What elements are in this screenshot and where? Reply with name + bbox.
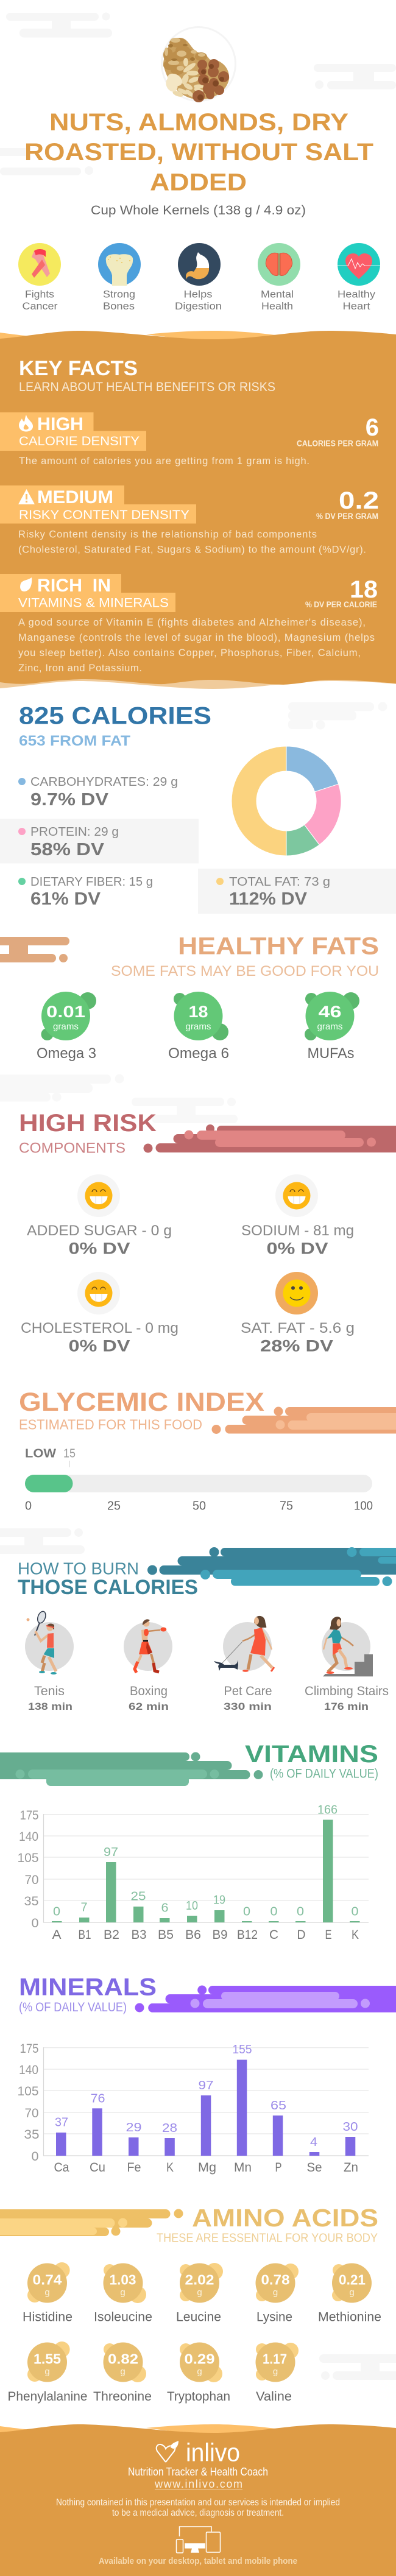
bar chart: minerals: Mg: [198, 2161, 216, 2175]
description: [18, 617, 375, 674]
amino: methionine: Methionine: [318, 2310, 381, 2324]
bar chart: minerals: Ca: [54, 2161, 69, 2175]
heading: HOW TO BURN: [18, 1559, 139, 1578]
text: helps digestion: Helps: [184, 289, 212, 300]
bar chart: vitamins: [17, 1803, 369, 1942]
bar chart: minerals: Mn: [234, 2161, 252, 2175]
title: [24, 109, 373, 196]
text: fights cancer: Cancer: [22, 301, 58, 312]
amino: isoleucine: [94, 2264, 152, 2324]
label: high: HIGH: [37, 414, 83, 434]
fat: mufas: 46: [318, 1003, 341, 1021]
heading: HEALTHY FATS: [178, 933, 379, 960]
legend: total fat: TOTAL FAT: 73 g: [229, 875, 330, 889]
bar chart: minerals: P: [275, 2161, 281, 2175]
item: cholesterol: [21, 1272, 179, 1355]
heading: THOSE CALORIES: [18, 1576, 198, 1599]
heading: HIGH RISK: [19, 1110, 157, 1137]
legend: total fat: [198, 869, 396, 914]
bar chart: minerals: 97: [199, 2079, 213, 2092]
bar chart: vitamins: 166: [317, 1803, 338, 1816]
bar chart: minerals: 70: [24, 2106, 39, 2120]
icon: heart, healthy heart: [338, 243, 380, 286]
legend: carbohydrates: CARBOHYDRATES: 29 g: [30, 775, 178, 789]
bar chart: vitamins: 97: [104, 1846, 118, 1859]
amino: methionine: g: [349, 2287, 355, 2298]
activity labels: 138 min: [28, 1701, 72, 1712]
subheading: (% OF DAILY VALUE): [270, 1766, 378, 1781]
text: mental health: Health: [261, 301, 293, 312]
hero food photo: mixed nuts: [162, 27, 235, 102]
item: added sugar: 0% DV: [68, 1239, 130, 1257]
bar chart: minerals: 29: [126, 2121, 141, 2134]
amino: threonine: g: [120, 2366, 126, 2377]
bar chart: vitamins: B3: [132, 1928, 146, 1942]
unit: CALORIES PER GRAM: [297, 439, 378, 448]
gauge: low 15: 0: [25, 1500, 32, 1513]
gauge: low 15: 15: [63, 1447, 76, 1461]
amino: tryptophan: [167, 2343, 230, 2404]
bar chart: vitamins: 0: [53, 1905, 60, 1919]
item: cholesterol: 0% DV: [68, 1336, 130, 1355]
panel: vitamins: [0, 1741, 378, 1942]
item: sodium: [241, 1174, 354, 1257]
legend: protein: [0, 819, 199, 864]
bar chart: vitamins: B12: [237, 1928, 258, 1942]
bar chart: minerals: 30: [342, 2120, 358, 2134]
bar chart: vitamins: B9: [212, 1928, 228, 1942]
panel: how to burn those calories: [18, 1547, 396, 1712]
item: sodium: 0% DV: [267, 1239, 328, 1257]
text: mental health: [261, 289, 294, 312]
fact: medium risky content density: [0, 485, 379, 556]
logo: inlivo: inlivo: [186, 2438, 240, 2467]
bar chart: minerals: Fe: [127, 2161, 141, 2175]
heading: VITAMINS: [245, 1741, 378, 1768]
text: healthy heart: [338, 289, 376, 312]
amino: leucine: 2.02: [185, 2272, 214, 2288]
icon: stomach, helps digestion: [178, 243, 221, 286]
text: helps digestion: Digestion: [175, 301, 222, 312]
item: added sugar: ADDED SUGAR - 0 g: [27, 1223, 172, 1239]
bar chart: minerals: Cu: [90, 2161, 105, 2175]
text: healthy heart: Healthy: [338, 289, 376, 300]
heading: key facts: KEY FACTS: [19, 357, 138, 380]
amino: phenylalanine: g: [44, 2366, 50, 2377]
amino: histidine: Histidine: [23, 2310, 72, 2324]
fat: mufas: MUFAs: [307, 1045, 355, 1062]
text: fights cancer: [22, 289, 58, 312]
disclaimer: to be a medical advice, diagnosis or treatment.: [112, 2508, 284, 2518]
heading: MINERALS: [19, 1974, 157, 2001]
amino: lysine: g: [273, 2287, 278, 2298]
amino: threonine: 0.82: [108, 2351, 138, 2367]
amino: isoleucine: 1.03: [110, 2272, 136, 2288]
decorative banner: [147, 1547, 396, 1586]
donut chart: [232, 746, 341, 856]
icon: devices: [177, 2527, 221, 2553]
amino: methionine: [318, 2264, 381, 2324]
text: strong bones: Strong: [103, 289, 135, 300]
amino: leucine: g: [197, 2287, 202, 2298]
decorative banner: [144, 1124, 396, 1152]
description: [18, 529, 366, 556]
title: ADDED: [150, 169, 247, 196]
bar chart: minerals: 37: [55, 2116, 68, 2130]
unit: % DV PER GRAM: [316, 512, 378, 521]
decorative banner: [135, 1986, 396, 2013]
item: saturated fat: SAT. FAT - 5.6 g: [241, 1320, 355, 1336]
gauge: low 15: 50: [193, 1500, 206, 1513]
description: Risky Content density is the relationship of bad components: [18, 529, 317, 540]
bar chart: vitamins: 7: [80, 1900, 88, 1914]
description: you sleep better). Also contains Copper, Phosphorus, Fiber, Calcium,: [18, 648, 361, 658]
gauge: low 15: 100: [354, 1500, 373, 1513]
activity labels: [28, 1684, 389, 1712]
bar chart: minerals: [17, 2042, 369, 2175]
value: 6: 6: [366, 414, 379, 441]
bar chart: vitamins: 175: [19, 1808, 39, 1823]
label: risky content density: RISKY CONTENT DENSITY: [19, 508, 189, 522]
bar chart: vitamins: B1: [78, 1928, 91, 1942]
label: vitamins and minerals: VITAMINS & MINERALS: [18, 596, 169, 610]
bar chart: vitamins: K: [352, 1928, 359, 1942]
amino: histidine: 0.74: [33, 2272, 62, 2288]
panel: calories: [0, 703, 396, 914]
amino: threonine: Threonine: [93, 2390, 152, 2404]
item: cholesterol: CHOLESTEROL - 0 mg: [21, 1320, 179, 1336]
legend: dietary fiber: 61% DV: [30, 889, 101, 909]
fat: omega 3: Omega 3: [37, 1045, 96, 1062]
fact: high calorie density: [0, 412, 379, 467]
amino: leucine: Leucine: [176, 2310, 221, 2324]
item: sodium: SODIUM - 81 mg: [241, 1223, 354, 1239]
disclaimer: [56, 2497, 340, 2518]
bar chart: minerals: 155: [233, 2043, 252, 2056]
tagline: Nutrition Tracker & Health Coach: [128, 2466, 268, 2478]
amino: histidine: [23, 2262, 72, 2324]
legend: carbohydrates: [18, 775, 178, 810]
activity: boxing: [124, 1619, 172, 1673]
amino: lysine: [256, 2264, 299, 2324]
bar chart: minerals: 175: [19, 2042, 39, 2056]
activity: tennis: [25, 1611, 74, 1674]
description: Zinc, Iron and Potassium.: [18, 663, 142, 674]
fat: omega 6: 18: [189, 1003, 208, 1021]
activity labels: 62 min: [129, 1701, 169, 1712]
bar chart: vitamins: 10: [186, 1899, 198, 1913]
fat: omega 3: 0.01: [46, 1003, 85, 1021]
icon: flame: [19, 415, 33, 431]
activity labels: Climbing Stairs: [305, 1684, 389, 1698]
bar chart: vitamins: 19: [213, 1894, 225, 1907]
amino: phenylalanine: 1.55: [34, 2351, 61, 2367]
title: NUTS, ALMONDS, DRY: [49, 109, 348, 136]
legend: total fat: 112% DV: [229, 889, 308, 909]
bar chart: vitamins: D: [297, 1928, 306, 1942]
bar chart: minerals: 105: [17, 2084, 39, 2098]
gauge: low 15: LOW: [25, 1447, 56, 1461]
bar chart: vitamins: E: [325, 1928, 331, 1942]
description: The amount of calories you are getting from 1 gram is high.: [19, 456, 309, 467]
bar chart: vitamins: 0: [351, 1905, 358, 1919]
bar chart: minerals: 65: [270, 2099, 286, 2112]
activity labels: 176 min: [324, 1701, 369, 1712]
amino: tryptophan: 0.29: [184, 2351, 214, 2367]
icon: brain, mental health: [258, 243, 300, 286]
bar chart: minerals: 76: [90, 2092, 105, 2105]
fat: mufas: [305, 992, 359, 1062]
legend: dietary fiber: [18, 875, 153, 909]
item: saturated fat: 28% DV: [260, 1336, 333, 1355]
icon: bone, strong bones: [98, 243, 141, 286]
fat: mufas: grams: [317, 1022, 342, 1032]
subheading: 653 from fat: 653 FROM FAT: [19, 733, 130, 749]
description: Manganese (controls the level of sugar in the blood), Magnesium (helps: [18, 632, 375, 643]
legend: dietary fiber: DIETARY FIBER: 15 g: [30, 875, 153, 889]
value: 18: 18: [350, 576, 378, 603]
subheading: LEARN ABOUT HEALTH BENEFITS OR RISKS: [19, 380, 275, 394]
icon: warning triangle: [18, 489, 35, 504]
text: strong bones: [103, 289, 135, 312]
heading: GLYCEMIC INDEX: [19, 1388, 264, 1417]
activity labels: Pet Care: [224, 1684, 272, 1698]
gauge: low 15: 75: [280, 1500, 293, 1513]
bar chart: minerals: 0: [32, 2150, 39, 2164]
bar chart: vitamins: 140: [19, 1830, 38, 1844]
text: healthy heart: Heart: [342, 301, 370, 312]
bar chart: vitamins: B5: [158, 1928, 174, 1942]
subheading: THESE ARE ESSENTIAL FOR YOUR BODY: [157, 2232, 378, 2245]
panel: key facts: [0, 331, 396, 689]
subheading: ESTIMATED FOR THIS FOOD: [19, 1417, 202, 1433]
bar chart: minerals: Se: [307, 2161, 322, 2175]
bar chart: vitamins: 105: [17, 1851, 39, 1865]
fact: rich in vitamins and minerals: [0, 574, 378, 674]
heading: [18, 1559, 198, 1599]
activity: climbing stairs: [322, 1617, 373, 1676]
label: medium: MEDIUM: [37, 487, 113, 507]
value: 0.2: 0.2: [339, 487, 379, 514]
fat: omega 6: Omega 6: [168, 1045, 229, 1062]
logo: inlivo: [157, 2438, 240, 2467]
available text: Available on your desktop, tablet and mobile phone: [99, 2556, 297, 2566]
amino: lysine: Lysine: [256, 2310, 292, 2324]
bar chart: minerals: 35: [24, 2128, 39, 2142]
label: rich in: RICH IN: [37, 576, 111, 596]
subheading: COMPONENTS: [19, 1140, 126, 1156]
legend: protein: PROTEIN: 29 g: [30, 825, 119, 839]
text: strong bones: Bones: [103, 301, 135, 312]
amino: phenylalanine: Phenylalanine: [7, 2390, 88, 2404]
benefit icons row: [18, 243, 380, 312]
panel: minerals: [17, 1974, 396, 2175]
decorative banner: [0, 1752, 263, 1786]
gauge: low 15: 25: [107, 1500, 121, 1513]
activity labels: Tenis: [34, 1684, 65, 1698]
website link: www.inlivo.com: [154, 2478, 242, 2490]
fat: omega 6: [168, 992, 229, 1062]
bar chart: minerals: 4: [310, 2136, 317, 2149]
fat: omega 6: grams: [185, 1022, 211, 1032]
amino: leucine: [176, 2263, 223, 2324]
amino: valine: Valine: [256, 2390, 292, 2404]
gauge: low 15: [25, 1447, 373, 1513]
label: calorie density: CALORIE DENSITY: [19, 434, 140, 448]
legend: protein: 58% DV: [30, 840, 105, 859]
bar chart: vitamins: 35: [24, 1894, 39, 1908]
amino: histidine: g: [44, 2287, 50, 2298]
text: helps digestion: [175, 289, 222, 312]
heading: AMINO ACIDS: [192, 2204, 378, 2232]
item: saturated fat: [241, 1272, 355, 1355]
amino: valine: [256, 2343, 299, 2404]
bar chart: vitamins: 0: [297, 1905, 304, 1919]
amino: valine: 1.17: [263, 2351, 287, 2367]
bar chart: minerals: 140: [19, 2063, 38, 2077]
amino: methionine: 0.21: [339, 2272, 366, 2288]
activity labels: 330 min: [224, 1701, 272, 1712]
decorative banner: [0, 937, 69, 962]
description: (Cholesterol, Saturated Fat, Sugars & Sodium) to the amount (%DV/gr).: [18, 545, 366, 556]
bar chart: vitamins: 70: [24, 1873, 39, 1887]
bar chart: vitamins: 0: [243, 1905, 250, 1919]
decorative banner: [212, 1407, 396, 1434]
description: A good source of Vitamin E (fights diabetes and Alzheimer's disease),: [18, 617, 366, 628]
bar chart: vitamins: C: [269, 1928, 278, 1942]
amino: isoleucine: g: [120, 2287, 126, 2298]
bar chart: minerals: Zn: [344, 2161, 358, 2175]
bar chart: vitamins: 0: [270, 1905, 278, 1919]
activity: pet care: [214, 1616, 274, 1672]
bar chart: minerals: K: [166, 2161, 174, 2175]
serving subtitle: Cup Whole Kernels (138 g / 4.9 oz): [91, 203, 306, 217]
disclaimer: Nothing contained in this presentation and our services is intended or implied: [56, 2497, 340, 2508]
text: fights cancer: Fights: [25, 289, 54, 300]
unit: % DV PER CALORIE: [305, 600, 377, 609]
amino: valine: g: [273, 2366, 278, 2377]
panel: amino acids: [0, 2204, 381, 2404]
icon: ribbon, fights cancer: [18, 243, 61, 286]
subheading: (% OF DAILY VALUE): [19, 2000, 127, 2014]
panel: healthy fats: [0, 933, 379, 1062]
item: added sugar: [27, 1174, 172, 1257]
amino: tryptophan: g: [197, 2366, 202, 2377]
fat: omega 3: [37, 992, 96, 1062]
legend: carbohydrates: 9.7% DV: [30, 790, 109, 810]
heading: 825 calories: 825 CALORIES: [19, 703, 211, 730]
panel: footer: [0, 2424, 396, 2576]
amino: isoleucine: Isoleucine: [94, 2310, 152, 2324]
amino: threonine: [93, 2343, 152, 2404]
fat: omega 3: grams: [53, 1022, 79, 1032]
bar chart: vitamins: 0: [32, 1916, 39, 1930]
amino: phenylalanine: [7, 2341, 88, 2404]
subheading: SOME FATS MAY BE GOOD FOR YOU: [111, 963, 379, 979]
amino: lysine: 0.78: [261, 2272, 290, 2288]
bar chart: vitamins: A: [52, 1928, 61, 1942]
amino: tryptophan: Tryptophan: [167, 2390, 230, 2404]
activity labels: Boxing: [130, 1684, 168, 1698]
panel: high risk components: [19, 1110, 396, 1355]
text: mental health: Mental: [261, 289, 294, 300]
title: ROASTED, WITHOUT SALT: [24, 139, 373, 166]
bar chart: vitamins: B2: [104, 1928, 119, 1942]
icon: leaf: [20, 577, 32, 591]
bar chart: minerals: 28: [162, 2122, 177, 2135]
bar chart: vitamins: 25: [130, 1890, 146, 1904]
bar chart: vitamins: B6: [185, 1928, 201, 1942]
panel: glycemic index: [19, 1388, 396, 1513]
bar chart: vitamins: 6: [161, 1902, 168, 1915]
decorative banner: [0, 2209, 183, 2236]
